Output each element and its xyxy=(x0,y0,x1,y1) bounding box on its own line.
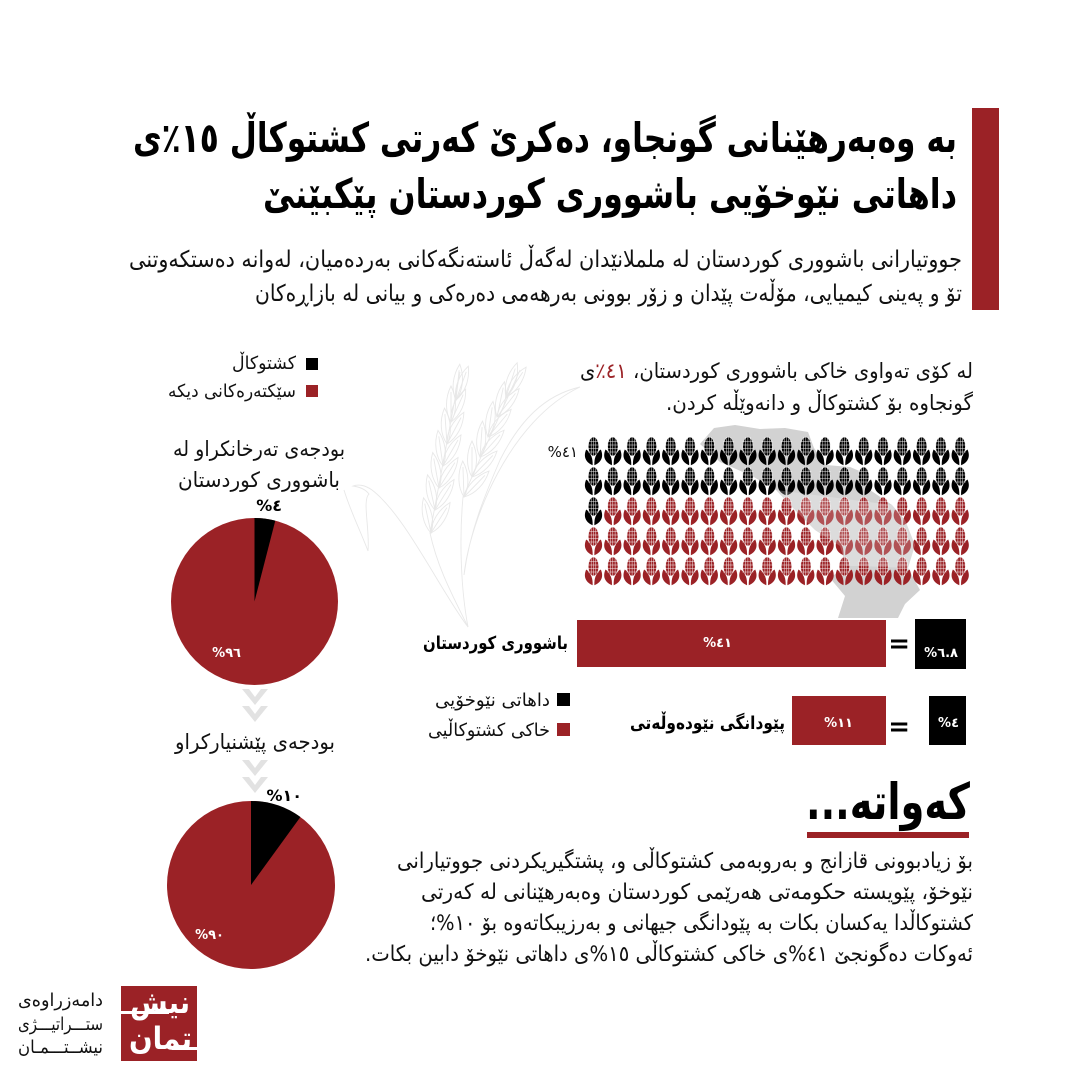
land share text xyxy=(580,359,973,415)
corn pictogram: 41 of 100 xyxy=(585,437,969,585)
pie chart: proposed budget: ٩٠% xyxy=(195,928,224,943)
heading: proposed budget: بودجەی پێشنیارکراو xyxy=(174,730,335,754)
decorative wheat illustration xyxy=(344,361,580,627)
conclusion text: ئەوکات دەگونجێ ٤١%ی خاکی کشتوکاڵی ١٥%ی داهاتی نێوخۆ دابین بکات. xyxy=(365,940,973,967)
left legend: کشتوکاڵ xyxy=(232,351,296,374)
conclusion text: کشتوکاڵدا یەکسان بکات بە پێودانگی جیهانی و بەرزیبکاتەوە بۆ ١٠%؛ xyxy=(430,909,974,936)
left legend: سێکتەرەکانی دیکە xyxy=(168,381,296,402)
corn pictogram label: ٤١% xyxy=(548,443,578,461)
land share text: لە کۆی تەواوی خاکی باشووری کوردستان، ٤١٪ی xyxy=(580,359,973,383)
bar: international standard: = xyxy=(888,712,910,742)
bar legend: داهاتی نێوخۆیی xyxy=(435,690,550,711)
heading: allocated budget: بودجەی تەرخانکراو لە xyxy=(173,437,345,461)
pie chart: allocated budget xyxy=(171,496,338,685)
bar: Kurdistan region xyxy=(423,619,966,669)
arrow: chevrons down xyxy=(242,689,268,722)
pie chart: allocated budget: ٤% xyxy=(256,496,282,515)
footer organisation name: دامەزراوەی xyxy=(18,990,103,1011)
bar: international standard xyxy=(630,696,966,745)
logo: نیش xyxy=(130,985,190,1021)
intro paragraph: جووتیارانی باشووری کوردستان لە ململانێدان لەگەڵ ئاستەنگەکانی بەردەمیان، لەوانە دەستکەوتنی xyxy=(129,245,962,273)
conclusion text: بۆ زیادبوونی قازانج و بەروبەمی کشتوکاڵی و، پشتگیریکردنی جووتیارانی xyxy=(397,847,973,874)
bar: Kurdistan region: ٦.٨% xyxy=(924,646,958,661)
footer organisation name: ستـــراتیـــژی xyxy=(18,1014,103,1035)
logo: تمان xyxy=(129,1021,192,1057)
bar: international standard: پێودانگی نێودەوڵەتی xyxy=(630,711,785,734)
intro paragraph: تۆ و پەینی کیمیایی، مۆڵەت پێدان و زۆر بوونی بەرهەمی دەرەکی و بیانی لە بازاڕەکان xyxy=(255,278,962,307)
left legend xyxy=(168,351,318,402)
map of Kurdistan background xyxy=(700,425,920,618)
map highlight over pictogram xyxy=(776,490,915,568)
pie chart: proposed budget xyxy=(167,786,335,969)
bar: Kurdistan region: باشووری کوردستان xyxy=(423,633,568,654)
logo xyxy=(121,985,197,1061)
footer organisation name: نیشــتـــمـان xyxy=(18,1037,103,1058)
bar legend: خاکی کشتوکاڵیی xyxy=(428,718,550,741)
bar: international standard: ١١% xyxy=(824,716,853,731)
footer organisation name xyxy=(18,990,103,1058)
bar legend xyxy=(428,690,570,741)
land share text: گونجاوە بۆ کشتوکاڵ و دانەوێڵە کردن. xyxy=(666,389,973,415)
title xyxy=(133,112,957,219)
conclusion text xyxy=(365,847,974,967)
bar: international standard: ٤% xyxy=(938,716,959,731)
bar: Kurdistan region: ٤١% xyxy=(703,636,732,651)
pie chart: allocated budget: ٩٦% xyxy=(212,646,241,661)
heading: allocated budget xyxy=(173,437,345,492)
bar: Kurdistan region: = xyxy=(888,629,910,659)
conclusion heading: کەواتە... xyxy=(806,773,971,832)
accent bar xyxy=(972,108,999,310)
intro paragraph xyxy=(129,245,962,307)
arrow: chevrons down xyxy=(242,760,268,793)
pie chart: proposed budget: ١٠% xyxy=(266,786,302,805)
conclusion text: نێوخۆ، پێویستە حکومەتی هەرێمی کوردستان وەبەرهێنانی لە کەرتی xyxy=(421,880,973,905)
heading: allocated budget: باشووری کوردستان xyxy=(178,468,340,492)
